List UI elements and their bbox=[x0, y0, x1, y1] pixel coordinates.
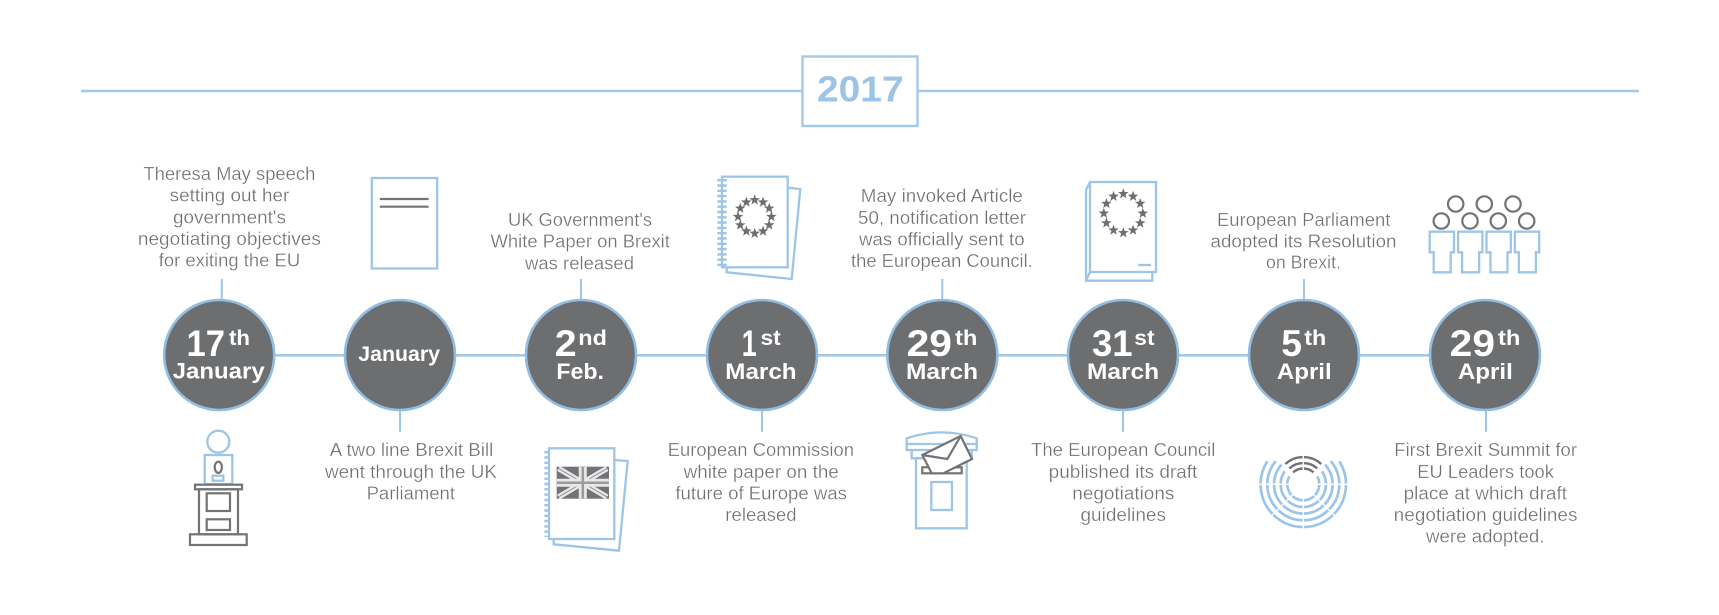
year heading: 2017 bbox=[802, 56, 918, 126]
description: First Brexit Summit: EU Leaders took bbox=[1417, 461, 1555, 482]
event: 29th April bbox=[1394, 196, 1583, 547]
description: First Brexit Summit: place at which draft bbox=[1404, 482, 1567, 503]
date circle: 29th April: 29 bbox=[1450, 323, 1495, 364]
date circle: 29th April: April bbox=[1458, 359, 1513, 384]
description: Theresa May speech: Theresa May speech bbox=[143, 163, 315, 184]
event: 1st March bbox=[668, 177, 859, 525]
description: UK White Paper: was released bbox=[524, 252, 634, 273]
event: 17th January bbox=[138, 163, 326, 545]
event: 31st March bbox=[1031, 182, 1221, 525]
description: Theresa May speech: negotiating objectives bbox=[138, 228, 321, 249]
date circle: 2nd Feb.: nd bbox=[578, 327, 607, 350]
description: Theresa May speech: government's bbox=[173, 206, 286, 227]
date circle: 5th April: April bbox=[1277, 359, 1332, 384]
icon: EU book bbox=[1086, 182, 1156, 281]
date circle: 29th March: th bbox=[955, 327, 977, 350]
description: European Commission white paper: released bbox=[725, 504, 797, 525]
date circle: January: January bbox=[358, 343, 440, 366]
date circle: 31st March: st bbox=[1134, 327, 1155, 350]
year heading: 2017: 2017 bbox=[817, 69, 904, 110]
date circle: 17th January bbox=[164, 300, 274, 410]
description: European Commission white paper: white paper on the bbox=[683, 461, 839, 482]
icon: group of leaders bbox=[1430, 196, 1539, 272]
date circle: 1st March: st bbox=[760, 327, 781, 350]
description: two line Brexit Bill: went through the UK bbox=[324, 461, 498, 482]
description: European Council guidelines: The European Council bbox=[1031, 439, 1215, 460]
date circle: 2nd Feb. bbox=[526, 300, 636, 410]
date circle: 29th April bbox=[1430, 300, 1540, 410]
event: January bbox=[324, 178, 502, 503]
description: European Council guidelines: published its draft bbox=[1049, 461, 1197, 482]
date circle: January bbox=[345, 300, 455, 410]
date circle: 31st March bbox=[1068, 300, 1178, 410]
date circle: 1st March: March bbox=[725, 359, 797, 384]
date circle: 5th April: th bbox=[1304, 327, 1326, 350]
event: 29th March bbox=[851, 185, 1033, 528]
description: Theresa May speech: for exiting the EU bbox=[159, 250, 300, 271]
icon: two line document bbox=[372, 178, 437, 268]
EU stars ring bbox=[1098, 188, 1148, 237]
icon: speaker at podium bbox=[190, 431, 247, 545]
description: European Commission white paper: European Commission bbox=[668, 439, 854, 460]
date circle: 29th March: 29 bbox=[907, 323, 952, 364]
description: UK White Paper: UK Government's bbox=[508, 209, 652, 230]
date circle: 2nd Feb.: 2 bbox=[555, 323, 577, 364]
description: European Parliament resolution: adopted its Resolution bbox=[1210, 230, 1396, 251]
description: First Brexit Summit: were adopted. bbox=[1425, 526, 1544, 547]
description: First Brexit Summit: First Brexit Summit for bbox=[1394, 439, 1577, 460]
date circle: 17th January: 17 bbox=[186, 323, 225, 364]
icon: notebook with Union flag bbox=[547, 448, 628, 551]
icon: parliament hemicycle bbox=[1255, 452, 1352, 530]
date circle: 5th April: 5 bbox=[1281, 323, 1302, 364]
description: European Parliament resolution: on Brexit. bbox=[1266, 252, 1341, 273]
description: European Parliament resolution: European Parliament bbox=[1217, 209, 1390, 230]
description: European Commission white paper: future of Europe was bbox=[675, 482, 847, 503]
description: UK White Paper: White Paper on Brexit bbox=[490, 230, 670, 251]
Union flag bbox=[557, 467, 609, 499]
event: 5th April bbox=[1210, 209, 1402, 530]
description: Article 50 invoked: was officially sent to bbox=[858, 229, 1025, 250]
date circle: 5th April bbox=[1249, 300, 1359, 410]
date circle: 31st March: 31 bbox=[1092, 323, 1133, 364]
description: Article 50 invoked: 50, notification letter bbox=[858, 207, 1026, 228]
description: two line Brexit Bill: Parliament bbox=[367, 482, 455, 503]
icon: post box with envelope bbox=[907, 432, 977, 528]
EU stars ring bbox=[733, 194, 777, 238]
date circle: 17th January: th bbox=[229, 327, 250, 350]
description: European Council guidelines: negotiations bbox=[1072, 482, 1174, 503]
description: two line Brexit Bill: A two line Brexit Bill bbox=[330, 439, 493, 460]
date circle: 31st March: March bbox=[1087, 359, 1159, 384]
date circle: 1st March: 1 bbox=[742, 323, 757, 364]
date circle: 29th April: th bbox=[1498, 327, 1520, 350]
description: Theresa May speech: setting out her bbox=[170, 185, 289, 206]
description: Article 50 invoked: May invoked Article bbox=[861, 185, 1023, 206]
date circle: 2nd Feb.: Feb. bbox=[556, 359, 604, 384]
date circle: 1st March bbox=[707, 300, 817, 410]
description: First Brexit Summit: negotiation guidelines bbox=[1394, 504, 1578, 525]
icon: notebook with EU stars bbox=[722, 177, 800, 279]
event: 2nd Feb. bbox=[490, 209, 675, 551]
description: Article 50 invoked: the European Council. bbox=[851, 250, 1033, 271]
description: European Council guidelines: guidelines bbox=[1080, 504, 1166, 525]
date circle: 29th March bbox=[887, 300, 997, 410]
date circle: 29th March: March bbox=[906, 359, 978, 384]
date circle: 17th January: January bbox=[173, 358, 266, 384]
